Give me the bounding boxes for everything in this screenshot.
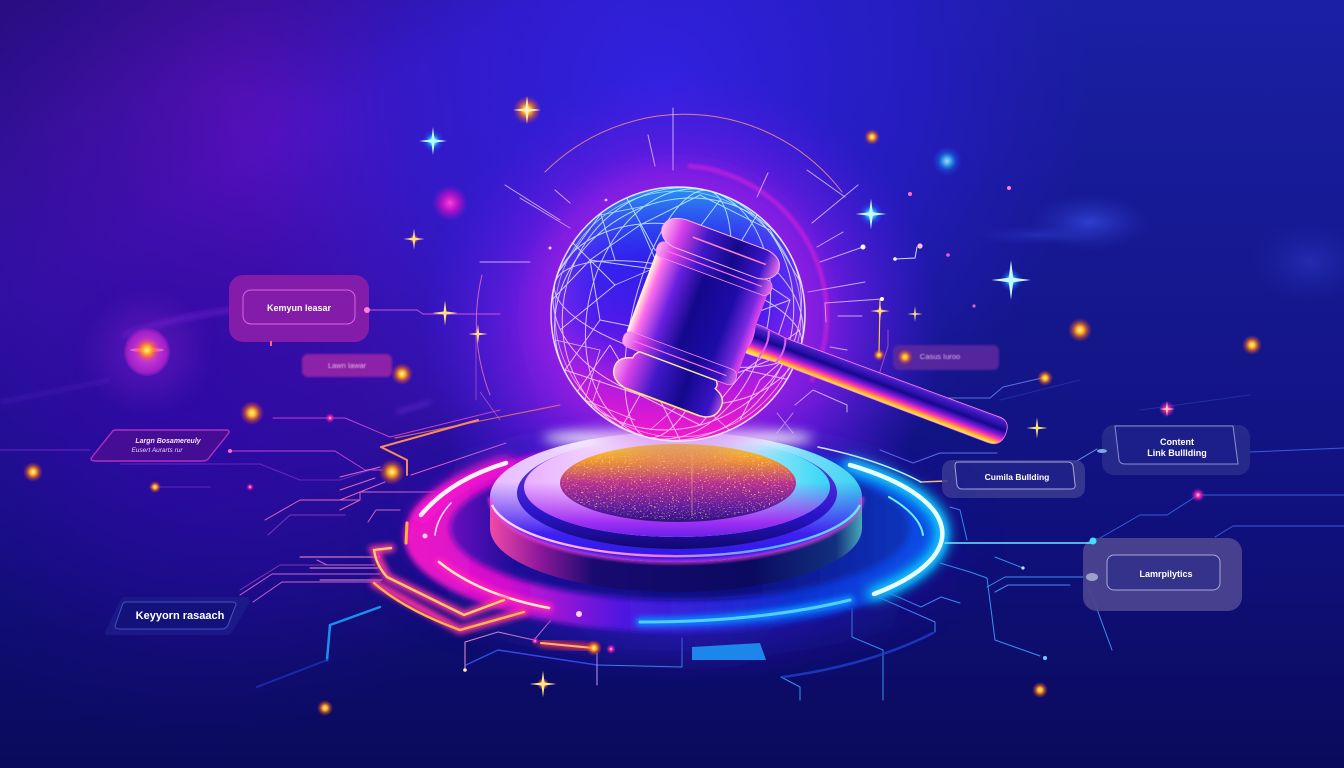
label box: blurred pink — [302, 354, 392, 377]
label box: top left — [229, 275, 370, 346]
label box: Content Link Building — [1097, 425, 1250, 475]
gavel — [605, 213, 1037, 519]
label box: Keyword research — [105, 597, 250, 635]
label box: analytics — [1083, 538, 1242, 611]
blue rectangle on ring — [692, 643, 766, 660]
magenta ring — [421, 463, 506, 515]
wireframe globe — [512, 154, 844, 474]
label box: Content Link Building: Content — [1160, 437, 1194, 447]
cyan ring glow — [374, 447, 1096, 648]
label box: blurred right — [893, 345, 999, 370]
arcs and radial lines around the globe — [476, 108, 1011, 433]
label box: top left: Kemyun Ieasar — [267, 303, 332, 313]
circuit lines: left — [0, 310, 560, 602]
label box: analytics: Lamrpilytics — [1139, 569, 1193, 579]
circuit lines: right — [465, 378, 1344, 700]
label box: blurred pink: Lawn Iawar — [328, 361, 367, 370]
podium — [490, 428, 862, 592]
label box: Keyword research: Keyyorn rasaach — [136, 610, 225, 622]
blue circuit lines: lower left — [257, 607, 380, 687]
label box: blurred right: Casus Iuroo — [920, 352, 960, 361]
label box: Content Link Building: Link Bulllding — [1147, 448, 1207, 458]
gavel top cap — [657, 213, 784, 284]
glowing orb — [99, 306, 195, 398]
gavel bottom cap — [609, 345, 729, 422]
stars and glowing points — [23, 96, 1262, 716]
label box: Cumila Building: Cumila Bullding — [985, 472, 1049, 482]
label box: slanted left: Eusert Aurarts rur — [131, 447, 183, 454]
label box: slanted left: Largn Bosamereuly — [135, 438, 202, 445]
gold textured dome — [560, 444, 796, 522]
gavel handle — [732, 319, 1011, 448]
neon ground ring — [356, 420, 1096, 672]
label box: slanted left — [91, 430, 232, 461]
label box: Cumila Building — [942, 460, 1085, 498]
gavel head body — [621, 240, 774, 387]
light streaks — [0, 310, 430, 412]
